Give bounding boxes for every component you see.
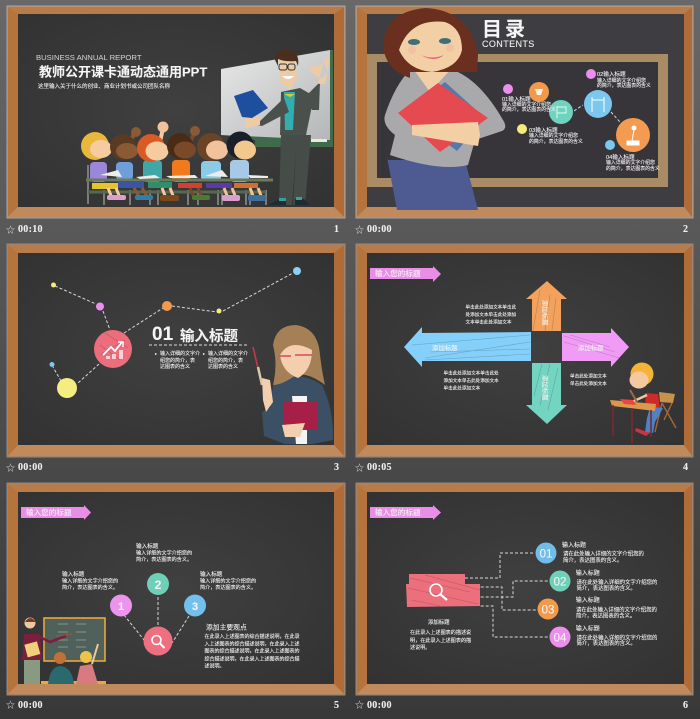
badge 01: 01 xyxy=(540,548,552,560)
text column 2: 输入详细的文字介 xyxy=(208,350,248,357)
text: point 3 xyxy=(200,570,256,591)
footer: 5 xyxy=(334,700,339,711)
heading: 目录 xyxy=(482,18,528,41)
teacher xyxy=(240,50,329,205)
slide 1: title xyxy=(6,6,345,235)
text block top: 单击此处添加文本单击此 xyxy=(466,304,516,310)
left text: 在此录入上述图表的描述说 xyxy=(410,629,471,636)
divider xyxy=(149,344,248,346)
footer: 00:00 xyxy=(367,224,392,235)
text column 2: 达图表的含义 xyxy=(208,363,238,370)
item 01: 的简介，表达图表的含义 xyxy=(502,106,556,113)
title ribbon xyxy=(21,505,91,520)
dashed connectors xyxy=(574,105,620,122)
main point text: 在此录入上述图表的综合描述说明，在此录 xyxy=(204,633,300,640)
badge 01 xyxy=(536,542,556,564)
item 01 text: 请在此处输入详细的文字介绍您的 xyxy=(563,550,644,558)
item 01: 01输入标题 xyxy=(502,95,531,103)
item 03 text: 输入标题 xyxy=(576,596,600,604)
node: green flag xyxy=(549,100,573,124)
left text: 添加标题 xyxy=(428,618,450,626)
item 04 text: 输入标题 xyxy=(576,624,600,632)
item 04: 04输入标题 xyxy=(606,153,635,161)
chalkboard frame xyxy=(356,6,693,218)
text: point 2: 输入标题 xyxy=(136,542,159,550)
text block lower left: 添加文本单击此处添加文本 xyxy=(444,377,499,384)
footer: ☆ xyxy=(355,700,364,710)
text: point 2 xyxy=(136,542,192,563)
text block right: 单击此处添加文本 xyxy=(570,372,607,380)
main title: 教师公开课卡通动态通用PPT xyxy=(39,64,207,80)
badge 02: 02 xyxy=(554,576,566,588)
text block lower left: 单击此处添加文本单击此处 xyxy=(444,370,499,376)
footer xyxy=(6,700,339,711)
badge 3: 3 xyxy=(192,601,198,613)
footer: ☆ xyxy=(6,225,15,235)
dashed connectors xyxy=(124,597,189,643)
slide 5: three points xyxy=(6,483,345,711)
inner blackboard xyxy=(367,54,668,187)
item 04: 的简介，表达图表的含义 xyxy=(606,165,660,172)
text column 1: ▸ xyxy=(155,351,157,356)
text: point 1: 简介，表达图表的含义。 xyxy=(62,584,118,591)
chalkboard frame xyxy=(356,244,693,457)
item 03: 03输入标题 xyxy=(529,126,558,134)
footer: 1 xyxy=(334,224,339,235)
node: orange trophy xyxy=(529,82,549,102)
title ribbon xyxy=(370,505,441,520)
section heading: 输入标题 xyxy=(180,327,238,345)
item 04 text: 简介，表达图表的含义。 xyxy=(576,639,636,647)
main point text: 图表的综合描述说明，在此录入上述图表的 xyxy=(204,648,300,655)
item 02: 02输入标题 xyxy=(597,70,626,78)
text block lower left xyxy=(444,370,499,392)
item 01 text: 输入标题 xyxy=(562,541,586,549)
footer xyxy=(6,462,339,473)
item 03 text xyxy=(576,596,657,620)
badge 2: 2 xyxy=(155,578,162,592)
arrow left: blue xyxy=(404,327,531,367)
title ribbon: 输入您的标题 xyxy=(375,268,421,278)
icon: magnifier circle xyxy=(144,626,172,656)
text column 2 xyxy=(203,350,248,370)
item 01: 输入详细的文字介绍您 xyxy=(502,101,551,108)
left text: 明，在此录入上述图表的描 xyxy=(410,637,471,644)
text column 2: 绍您的简介，表 xyxy=(208,357,243,364)
item 04 xyxy=(606,153,660,172)
text column 1: 输入详细的文字介 xyxy=(160,350,200,357)
badge 1: 1 xyxy=(118,601,124,613)
main point text: 综合描述说明，在此录入上述图表的综合描 xyxy=(204,655,300,662)
text: point 1: 输入详细的文字介绍您的 xyxy=(62,578,118,584)
text: point 3: 简介，表达图表的含义。 xyxy=(200,584,256,591)
text block top: 处添加文本单击此处添加 xyxy=(466,311,516,318)
student 6 xyxy=(226,132,266,201)
item 01 xyxy=(502,95,556,113)
chalkboard frame xyxy=(7,6,345,218)
item 02: 输入详细的文字介绍您 xyxy=(597,77,646,84)
footer xyxy=(355,462,688,473)
footer xyxy=(355,224,688,235)
chalkboard frame xyxy=(7,244,345,457)
main point text: 添加主要观点 xyxy=(206,622,247,632)
student 5 xyxy=(197,133,240,201)
text: point 3: 输入详细的文字介绍您的 xyxy=(200,578,256,584)
footer: ☆ xyxy=(6,463,15,473)
student 1 xyxy=(81,132,126,200)
student 3 xyxy=(137,122,179,201)
footer: ☆ xyxy=(355,463,364,473)
text block lower left: 单击此处添加文本 xyxy=(444,384,481,392)
slide 6: four items xyxy=(355,483,693,711)
badge 04 xyxy=(550,626,570,648)
dashed connectors xyxy=(465,553,549,637)
chairs and desk xyxy=(88,165,266,205)
icon: growth chart circle xyxy=(94,330,132,368)
classroom scene xyxy=(22,618,106,684)
student 2 xyxy=(110,127,153,200)
item 03 xyxy=(529,126,583,145)
text block top xyxy=(466,304,516,326)
item 02 text: 请在此处输入详细的文字介绍您的 xyxy=(576,578,657,586)
item 03 text: 简介，表达图表的含义。 xyxy=(576,612,635,620)
item 02 text xyxy=(576,569,657,592)
description: 这里输入关于什么的创业、商业计划书或公司团队名称 xyxy=(38,82,171,90)
footer: 00:00 xyxy=(18,462,43,473)
item 04 text xyxy=(576,624,657,647)
dashed network xyxy=(53,273,293,383)
badge 3 xyxy=(184,594,206,616)
node: orange joystick xyxy=(616,118,650,152)
item 02 text: 输入标题 xyxy=(576,569,600,577)
item 01 text xyxy=(562,541,644,564)
item 04: 输入详细的文字介绍您 xyxy=(606,159,655,166)
item 01 text: 简介，表达图表的含义。 xyxy=(563,556,622,564)
footer xyxy=(6,224,339,235)
left text: 述说明。 xyxy=(410,644,430,651)
slide 4: four arrows xyxy=(355,244,693,473)
boy at desk xyxy=(610,362,676,443)
students group xyxy=(81,122,273,205)
badge 2 xyxy=(147,573,169,595)
arrow left: blue: 添加标题 xyxy=(432,343,458,352)
chalkboard frame xyxy=(356,483,693,695)
item 02 text: 简介，表达图表的含义。 xyxy=(576,584,636,592)
arrow right: pink: 添加标题 xyxy=(578,343,604,352)
slide 2: contents xyxy=(355,6,693,235)
teacher with pointer xyxy=(253,325,333,444)
book xyxy=(234,90,268,118)
item 03: 输入详细的文字介绍您 xyxy=(529,132,578,139)
footer: 3 xyxy=(334,462,339,473)
arrow down: green: 添加标题 xyxy=(541,375,550,401)
footer: ☆ xyxy=(355,225,364,235)
teacher with folder xyxy=(383,8,505,210)
chalkboard frame xyxy=(7,483,345,695)
whiteboard xyxy=(221,50,333,147)
item 04 text: 请在此处输入详细的文字介绍您的 xyxy=(576,634,657,642)
slide 3: section xyxy=(6,244,345,473)
footer: 2 xyxy=(683,224,688,235)
badge 1 xyxy=(110,594,132,616)
desk xyxy=(86,170,273,182)
text: point 1: 输入标题 xyxy=(62,570,85,578)
footer: 00:05 xyxy=(367,462,392,473)
scribble block with magnifier xyxy=(406,574,480,607)
heading english: CONTENTS xyxy=(482,39,535,49)
arrow right: pink xyxy=(562,328,629,367)
network dots xyxy=(50,267,301,398)
footer: 00:00 xyxy=(18,700,43,711)
subtitle english: BUSINESS ANNUAL REPORT xyxy=(36,53,142,62)
text: point 2: 简介，表达图表的含义。 xyxy=(136,556,192,563)
text: point 1 xyxy=(62,570,118,591)
left text xyxy=(410,618,471,651)
badge 03: 03 xyxy=(542,604,554,616)
badge 02 xyxy=(550,570,570,592)
item 02: 的简介，表达图表的含义 xyxy=(597,82,651,89)
footer: ☆ xyxy=(6,700,15,710)
arrow up: orange xyxy=(526,281,567,331)
text block top: 文本单击此处添加文本 xyxy=(466,318,512,326)
accent dots xyxy=(503,69,615,150)
text: point 2: 输入详细的文字介绍您的 xyxy=(136,550,192,556)
node: blue gate xyxy=(584,90,612,118)
footer: 00:10 xyxy=(18,224,43,235)
text block right: 单击此处添加文本 xyxy=(570,380,607,387)
student 4 xyxy=(167,126,210,200)
text block right xyxy=(570,372,607,387)
title ribbon: 输入您的标题 xyxy=(375,507,421,517)
main point text xyxy=(204,622,300,670)
arrow up: orange: 添加标题 xyxy=(541,300,550,326)
badge 03 xyxy=(538,598,558,620)
footer xyxy=(355,700,688,711)
text column 1: 达图表的含义 xyxy=(160,363,190,370)
arrow down: green xyxy=(526,363,567,424)
text: point 3: 输入标题 xyxy=(200,570,223,578)
main point text: 述说明。 xyxy=(204,663,225,670)
item 02 xyxy=(597,70,651,89)
section number: 01 xyxy=(152,324,174,345)
footer: 6 xyxy=(683,700,688,711)
item 03: 的简介，表达图表的含义 xyxy=(529,138,583,145)
footer: 00:00 xyxy=(367,700,392,711)
title ribbon xyxy=(370,266,441,282)
item 03 text: 请在此处输入详细的文字介绍您的 xyxy=(576,606,657,614)
text column 1 xyxy=(155,350,200,370)
text column 2: ▸ xyxy=(203,351,205,356)
title ribbon: 输入您的标题 xyxy=(26,507,72,517)
footer: 4 xyxy=(683,462,688,473)
text column 1: 绍您的简介，表 xyxy=(160,357,195,364)
main point text: 入上述图表的综合描述说明，在此录入上述 xyxy=(204,640,300,647)
badge 04: 04 xyxy=(554,632,567,644)
